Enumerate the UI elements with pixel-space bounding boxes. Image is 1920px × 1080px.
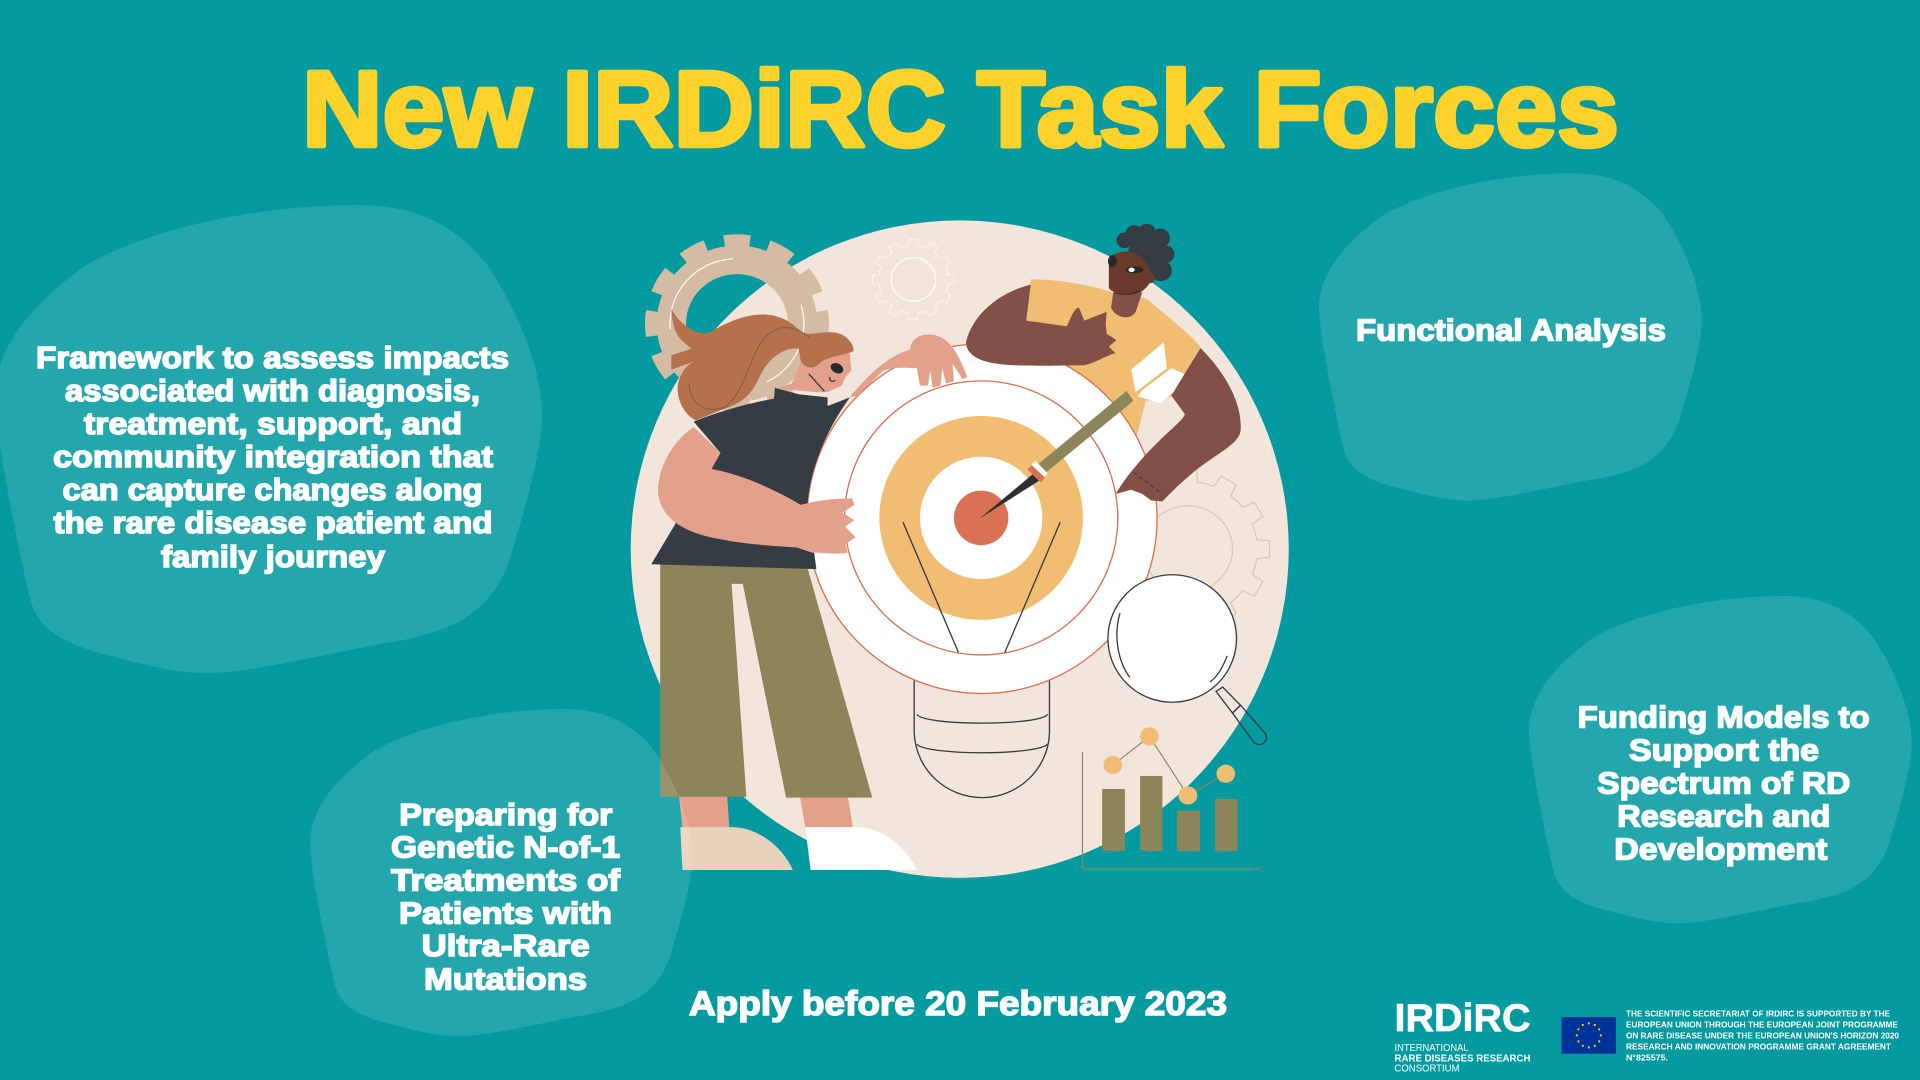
text: framework panel: the rare disease patient and [54,505,492,540]
blob: genetic n-of-1 panel background [310,709,693,1036]
man torso shirt [1024,279,1200,436]
light bulb base [914,681,1049,798]
text: funding models: Spectrum of RD [1597,765,1850,800]
text: framework panel: family journey [161,539,386,574]
title: New IRDiRC Task Forces [302,48,1619,169]
EU funding statement [1626,1010,1899,1063]
blob: framework panel background [0,205,542,673]
text: genetic n-of-1: Ultra-Rare [422,928,590,963]
man figure [966,224,1241,501]
bar and line chart [1083,727,1261,869]
icon: EU flag [1562,1017,1616,1054]
IRDiRC logo: INTERNATIONAL [1394,1043,1469,1054]
IRDiRC logo: CONSORTIUM [1394,1064,1460,1075]
deadline text: Apply before 20 February 2023 [689,985,1227,1023]
target bulb [807,344,1157,694]
IRDiRC logo [1394,997,1530,1075]
text: framework panel: associated with diagnosis, [65,373,480,408]
text: funding models: Research and [1617,799,1830,834]
text: genetic n-of-1: Genetic N-of-1 [391,830,620,865]
text: genetic n-of-1 [391,797,621,996]
text: funding models: Development [1614,831,1827,866]
text: funding models: Support the [1629,733,1819,768]
IRDiRC logo: IRDiRC [1394,997,1530,1040]
text: genetic n-of-1: Preparing for [399,797,612,832]
EU funding statement: N°825575. [1626,1054,1668,1063]
text: framework panel: Framework to assess impacts [36,340,509,375]
text: funding models [1578,699,1870,866]
icon: faint gear behind bulb [1106,470,1270,628]
EU funding statement: ON RARE DISEASE UNDER THE EUROPEAN UNION'S HORIZON 2020 [1626,1031,1899,1040]
text: functional analysis: Functional Analysis [1356,313,1666,348]
text: genetic n-of-1: Treatments of [391,863,621,898]
text: genetic n-of-1: Patients with [399,895,612,930]
text: genetic n-of-1: Mutations [424,961,587,996]
magnifying glass [1108,575,1266,744]
icon: tan gear [639,229,835,419]
text: framework panel: treatment, support, and [84,406,462,441]
IRDiRC logo: RARE DISEASES RESEARCH [1394,1054,1530,1065]
EU funding statement: EUROPEAN UNION THROUGH THE EUROPEAN JOINT PROGRAMME [1626,1021,1899,1030]
icon: white outline gear [872,240,954,319]
text: framework panel [36,340,509,574]
dart arrow [979,342,1191,519]
blob: functional analysis panel background [1319,173,1702,501]
blob: funding models panel background [1529,596,1912,923]
text: framework panel: community integration that [53,439,493,474]
central illustration [631,220,1289,878]
EU funding statement: RESEARCH AND INNOVATION PROGRAMME GRANT AGREEMENT [1626,1043,1891,1052]
text: funding models: Funding Models to [1578,699,1870,734]
text: framework panel: can capture changes along [62,472,483,507]
EU funding statement: THE SCIENTIFIC SECRETARIAT OF IRDIRC IS SUPPORTED BY THE [1626,1010,1891,1019]
woman figure [651,309,967,870]
beige background circle [631,220,1289,878]
